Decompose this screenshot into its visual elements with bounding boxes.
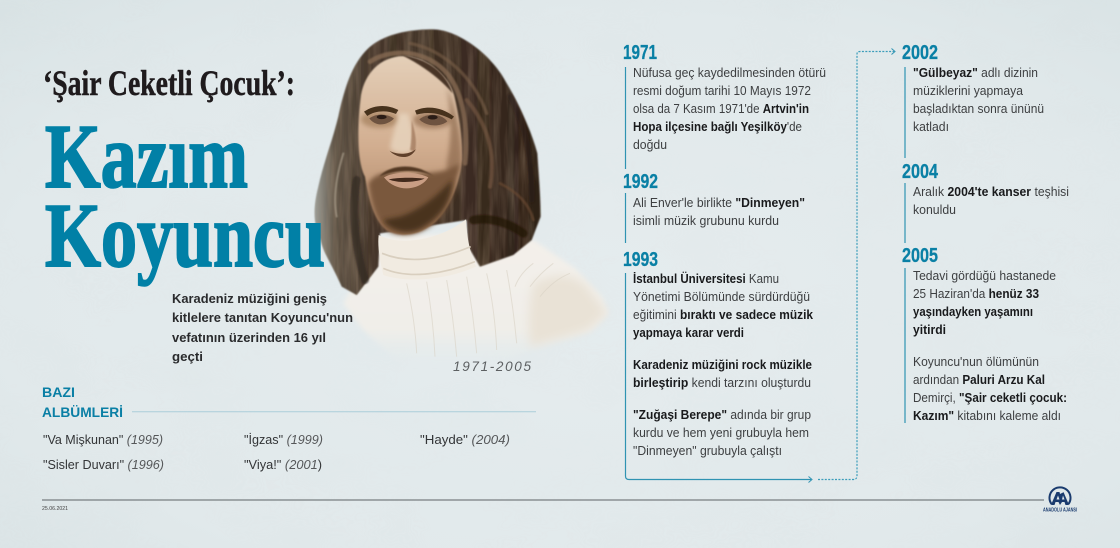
timeline: 1993: Yönetimi Bölümünde sürdürdüğü	[633, 290, 810, 304]
timeline: 2005: Kazım" kitabını kaleme aldı	[913, 409, 1061, 423]
timeline: 2005: yitirdi	[913, 323, 946, 337]
nose	[390, 113, 414, 154]
albums list: "Hayde" (2004)	[420, 433, 510, 447]
timeline: 2005: Demirçi, "Şair ceketli çocuk:	[913, 391, 1067, 405]
albums heading: BAZI	[42, 384, 75, 400]
albums heading	[42, 384, 536, 420]
timeline connector	[626, 48, 895, 482]
timeline: 1971: resmi doğum tarihi 10 Mayıs 1972	[633, 84, 811, 98]
timeline: 1971: Hopa ilçesine bağlı Yeşilköy'de	[633, 120, 802, 134]
eye sockets	[361, 111, 399, 128]
timeline: 1993: "Zuğaşi Berepe" adında bir grup	[633, 408, 811, 422]
timeline: 2005: Koyuncu'nun ölümünün	[913, 355, 1039, 369]
timeline: 1992: isimli müzik grubunu kurdu	[633, 214, 779, 228]
timeline: 1993: 1993	[623, 249, 658, 271]
timeline: 1971	[623, 42, 826, 169]
timeline: 2002: başladıktan sonra ününü	[913, 102, 1044, 116]
timeline: 2005: yaşındayken yaşamını	[913, 305, 1033, 319]
name heading: Kazım	[45, 106, 248, 207]
intro text: kitlelere tanıtan Koyuncu'nun	[172, 310, 353, 325]
mouth	[384, 173, 428, 188]
timeline: 1971: 1971	[623, 42, 657, 64]
hair highlights	[335, 43, 533, 280]
face shadow on right	[447, 87, 462, 176]
footer rule and date: 25.06.2021	[42, 506, 68, 512]
timeline: 2002: katladı	[913, 120, 949, 134]
intro text: vefatının üzerinden 16 yıl	[172, 330, 326, 345]
albums heading: ALBÜMLERİ	[42, 404, 123, 420]
timeline: 1993	[623, 249, 814, 458]
timeline: 2004: Aralık 2004'te kanser teşhisi	[913, 185, 1069, 199]
timeline: 2005: 25 Haziran'da henüz 33	[913, 287, 1039, 301]
timeline: 1993: Karadeniz müziğini rock müzikle	[633, 358, 812, 372]
name heading: Koyuncu	[45, 185, 325, 286]
timeline: 1992: 1992	[623, 171, 658, 193]
collar	[378, 219, 476, 280]
title: Şair Ceketli Çocuk: ‘Şair Ceketli Çocuk’:	[43, 63, 295, 103]
beard	[368, 163, 459, 235]
timeline: 1971: Nüfusa geç kaydedilmesinden ötürü	[633, 66, 826, 80]
timeline: 1993: İstanbul Üniversitesi Kamu	[633, 271, 779, 286]
albums list: "Viya!" (2001)	[244, 458, 322, 472]
timeline: 2002: "Gülbeyaz" adlı dizinin	[913, 66, 1038, 80]
timeline: 1971: olsa da 7 Kasım 1971'de Artvin'in	[633, 102, 809, 116]
sweater	[343, 233, 608, 367]
hair	[315, 29, 541, 295]
forehead hair shadow	[402, 55, 453, 93]
timeline: 1993: kurdu ve hem yeni grubuyla hem	[633, 426, 809, 440]
life dates: 1971-2005	[453, 359, 531, 374]
timeline: 1992: Ali Enver'le birlikte "Dinmeyen"	[633, 196, 805, 210]
timeline: 2005: ardından Paluri Arzu Kal	[913, 373, 1045, 387]
timeline: 1993: "Dinmeyen" grubuyla çalıştı	[633, 444, 782, 458]
timeline: 2004	[902, 161, 1069, 243]
icon: Anadolu Ajansı logo: ANADOLU AJANSI	[1043, 508, 1077, 514]
intro text: Karadeniz müziğini geniş	[172, 291, 327, 306]
timeline: 2002	[902, 42, 1044, 158]
timeline: 1993: yapmaya karar verdi	[633, 326, 744, 340]
eyebrows	[364, 106, 398, 116]
albums list: "İgzas" (1999)	[244, 433, 323, 447]
timeline: 2002: müziklerini yapmaya	[913, 84, 1023, 98]
albums list	[43, 433, 510, 472]
timeline: 2004: 2004	[902, 161, 939, 183]
albums list: "Va Mişkunan" (1995)	[43, 433, 163, 447]
timeline: 2004: konuldu	[913, 203, 956, 217]
icon: Anadolu Ajansı logo	[1043, 487, 1077, 514]
timeline: 2005: Tedavi gördüğü hastanede	[913, 269, 1056, 283]
portrait photo of Kazım Koyuncu	[315, 29, 608, 367]
timeline: 2005: 2005	[902, 245, 938, 267]
albums list: "Sisler Duvarı" (1996)	[43, 458, 164, 472]
eyes	[369, 115, 394, 124]
timeline: 2005	[902, 245, 1067, 423]
timeline: 1992	[623, 171, 805, 243]
timeline: 2002: 2002	[902, 42, 938, 64]
face	[358, 55, 462, 235]
name heading	[45, 106, 325, 286]
intro text: geçti	[172, 349, 203, 364]
timeline: 1971: doğdu	[633, 138, 667, 152]
timeline: 1993: eğitimini bıraktı ve sadece müzik	[633, 308, 814, 322]
timeline: 1993: birleştirip kendi tarzını oluşturdu	[633, 376, 811, 390]
intro text	[172, 291, 353, 364]
